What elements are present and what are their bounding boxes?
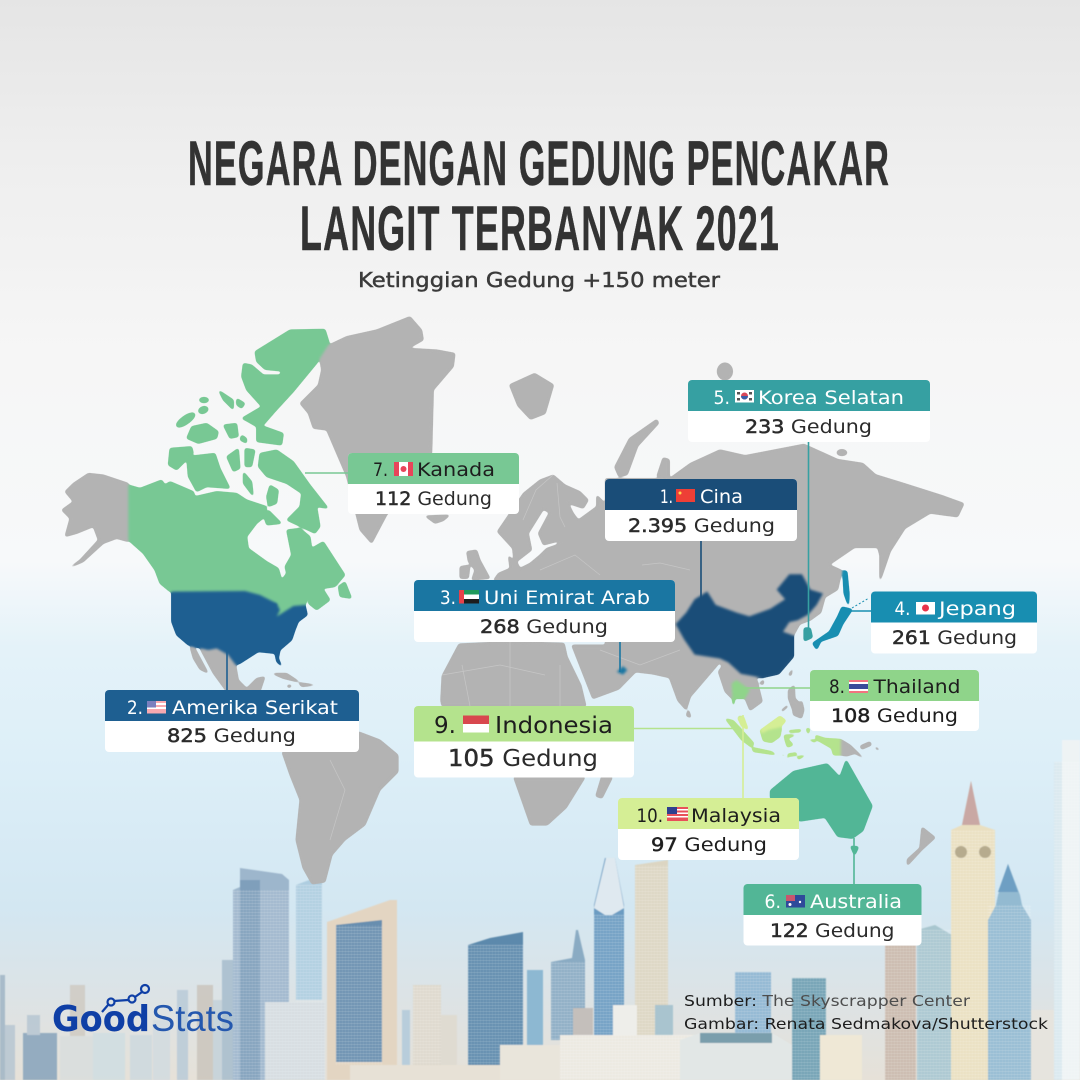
skyline photo — [0, 740, 1080, 1080]
label: 3 Uni Emirat Arab — [414, 580, 675, 642]
flag: thailand — [849, 680, 868, 693]
source credits — [684, 992, 1048, 1033]
logo: goodstats: Good — [52, 999, 150, 1040]
label: 5 Korea Selatan: Korea Selatan — [758, 387, 904, 409]
china — [676, 574, 823, 678]
label: 3 Uni Emirat Arab: 3. — [440, 587, 456, 609]
japan — [812, 570, 852, 650]
label: 9 Indonesia: Indonesia — [495, 713, 613, 739]
uae — [617, 666, 627, 675]
label: 7 Kanada: Kanada — [417, 459, 495, 481]
flag: indonesia — [463, 716, 489, 732]
label: 1 Cina: 2.395 Gedung — [628, 515, 775, 537]
flag: china — [676, 489, 695, 502]
logo: goodstats — [52, 985, 234, 1040]
americas gray land — [62, 317, 455, 692]
flag: uae — [459, 590, 479, 604]
south korea — [804, 628, 812, 641]
southeast asia gray land — [718, 660, 881, 759]
new zealand — [907, 827, 935, 866]
source credits: Sumber: The Skyscrapper Center — [684, 992, 971, 1010]
title — [188, 129, 890, 264]
label: 10 Malaysia — [618, 798, 799, 860]
subtitle: Ketinggian Gedung +150 meter — [358, 268, 721, 292]
country borders — [330, 475, 690, 840]
label: 8 Thailand: 108 Gedung — [831, 705, 958, 727]
label: 4 Jepang — [871, 592, 1037, 654]
world map — [62, 317, 964, 884]
label: 8 Thailand: 8. — [829, 676, 845, 698]
label: 1 Cina — [605, 479, 797, 541]
flag: japan — [916, 602, 935, 614]
ryukyu dotted — [852, 598, 869, 608]
label: 7 Kanada — [348, 453, 519, 514]
label: 3 Uni Emirat Arab: Uni Emirat Arab — [484, 587, 650, 609]
eurasia and africa gray land — [441, 363, 964, 825]
label: 7 Kanada: 112 Gedung — [375, 488, 492, 510]
label: 2 Amerika Serikat: 825 Gedung — [167, 725, 296, 747]
flag: malaysia — [667, 807, 688, 821]
label: 10 Malaysia: 10. — [636, 805, 663, 827]
flag: south korea — [735, 390, 754, 402]
label: 8 Thailand: Thailand — [872, 676, 960, 698]
icon: chart nodes — [102, 985, 149, 1012]
flag: australia — [786, 895, 805, 908]
label: 5 Korea Selatan: 5. — [714, 387, 730, 409]
flag: usa — [147, 701, 166, 714]
europe gray land — [460, 475, 607, 581]
label: 10 Malaysia: Malaysia — [691, 805, 781, 827]
label: 1 Cina: Cina — [700, 486, 743, 508]
south america — [282, 732, 398, 884]
flag: canada — [394, 462, 413, 476]
canada — [128, 329, 352, 617]
label: 9 Indonesia: 9. — [434, 713, 456, 739]
label: 2 Amerika Serikat: Amerika Serikat — [172, 697, 338, 719]
malaysia — [737, 716, 786, 733]
label: 5 Korea Selatan — [688, 380, 930, 442]
label: 6 Australia: Australia — [810, 891, 902, 913]
label: 1 Cina: 1. — [660, 486, 673, 508]
thailand — [732, 680, 750, 717]
connector lines — [227, 442, 871, 884]
label: 6 Australia — [744, 884, 922, 946]
label: 4 Jepang: 261 Gedung — [892, 627, 1017, 649]
usa — [172, 591, 307, 667]
label: 6 Australia: 6. — [764, 891, 781, 913]
label: 7 Kanada: 7. — [373, 459, 388, 481]
label: 9 Indonesia — [414, 706, 634, 778]
label: 8 Thailand — [810, 670, 979, 731]
source credits: Gambar: Renata Sedmakova/Shutterstock — [684, 1015, 1048, 1033]
label: 6 Australia: 122 Gedung — [770, 920, 894, 942]
australia — [770, 760, 872, 856]
label: 2 Amerika Serikat — [105, 690, 359, 752]
label: 9 Indonesia: 105 Gedung — [448, 746, 598, 772]
logo: goodstats: Stats — [151, 998, 234, 1039]
label: 4 Jepang: Jepang — [938, 598, 1016, 620]
indonesia — [725, 718, 841, 759]
label: 2 Amerika Serikat: 2. — [127, 697, 143, 719]
label: 10 Malaysia: 97 Gedung — [651, 834, 767, 856]
label: 3 Uni Emirat Arab: 268 Gedung — [480, 616, 608, 638]
label: 4 Jepang: 4. — [894, 598, 910, 620]
label: 5 Korea Selatan: 233 Gedung — [745, 416, 872, 438]
